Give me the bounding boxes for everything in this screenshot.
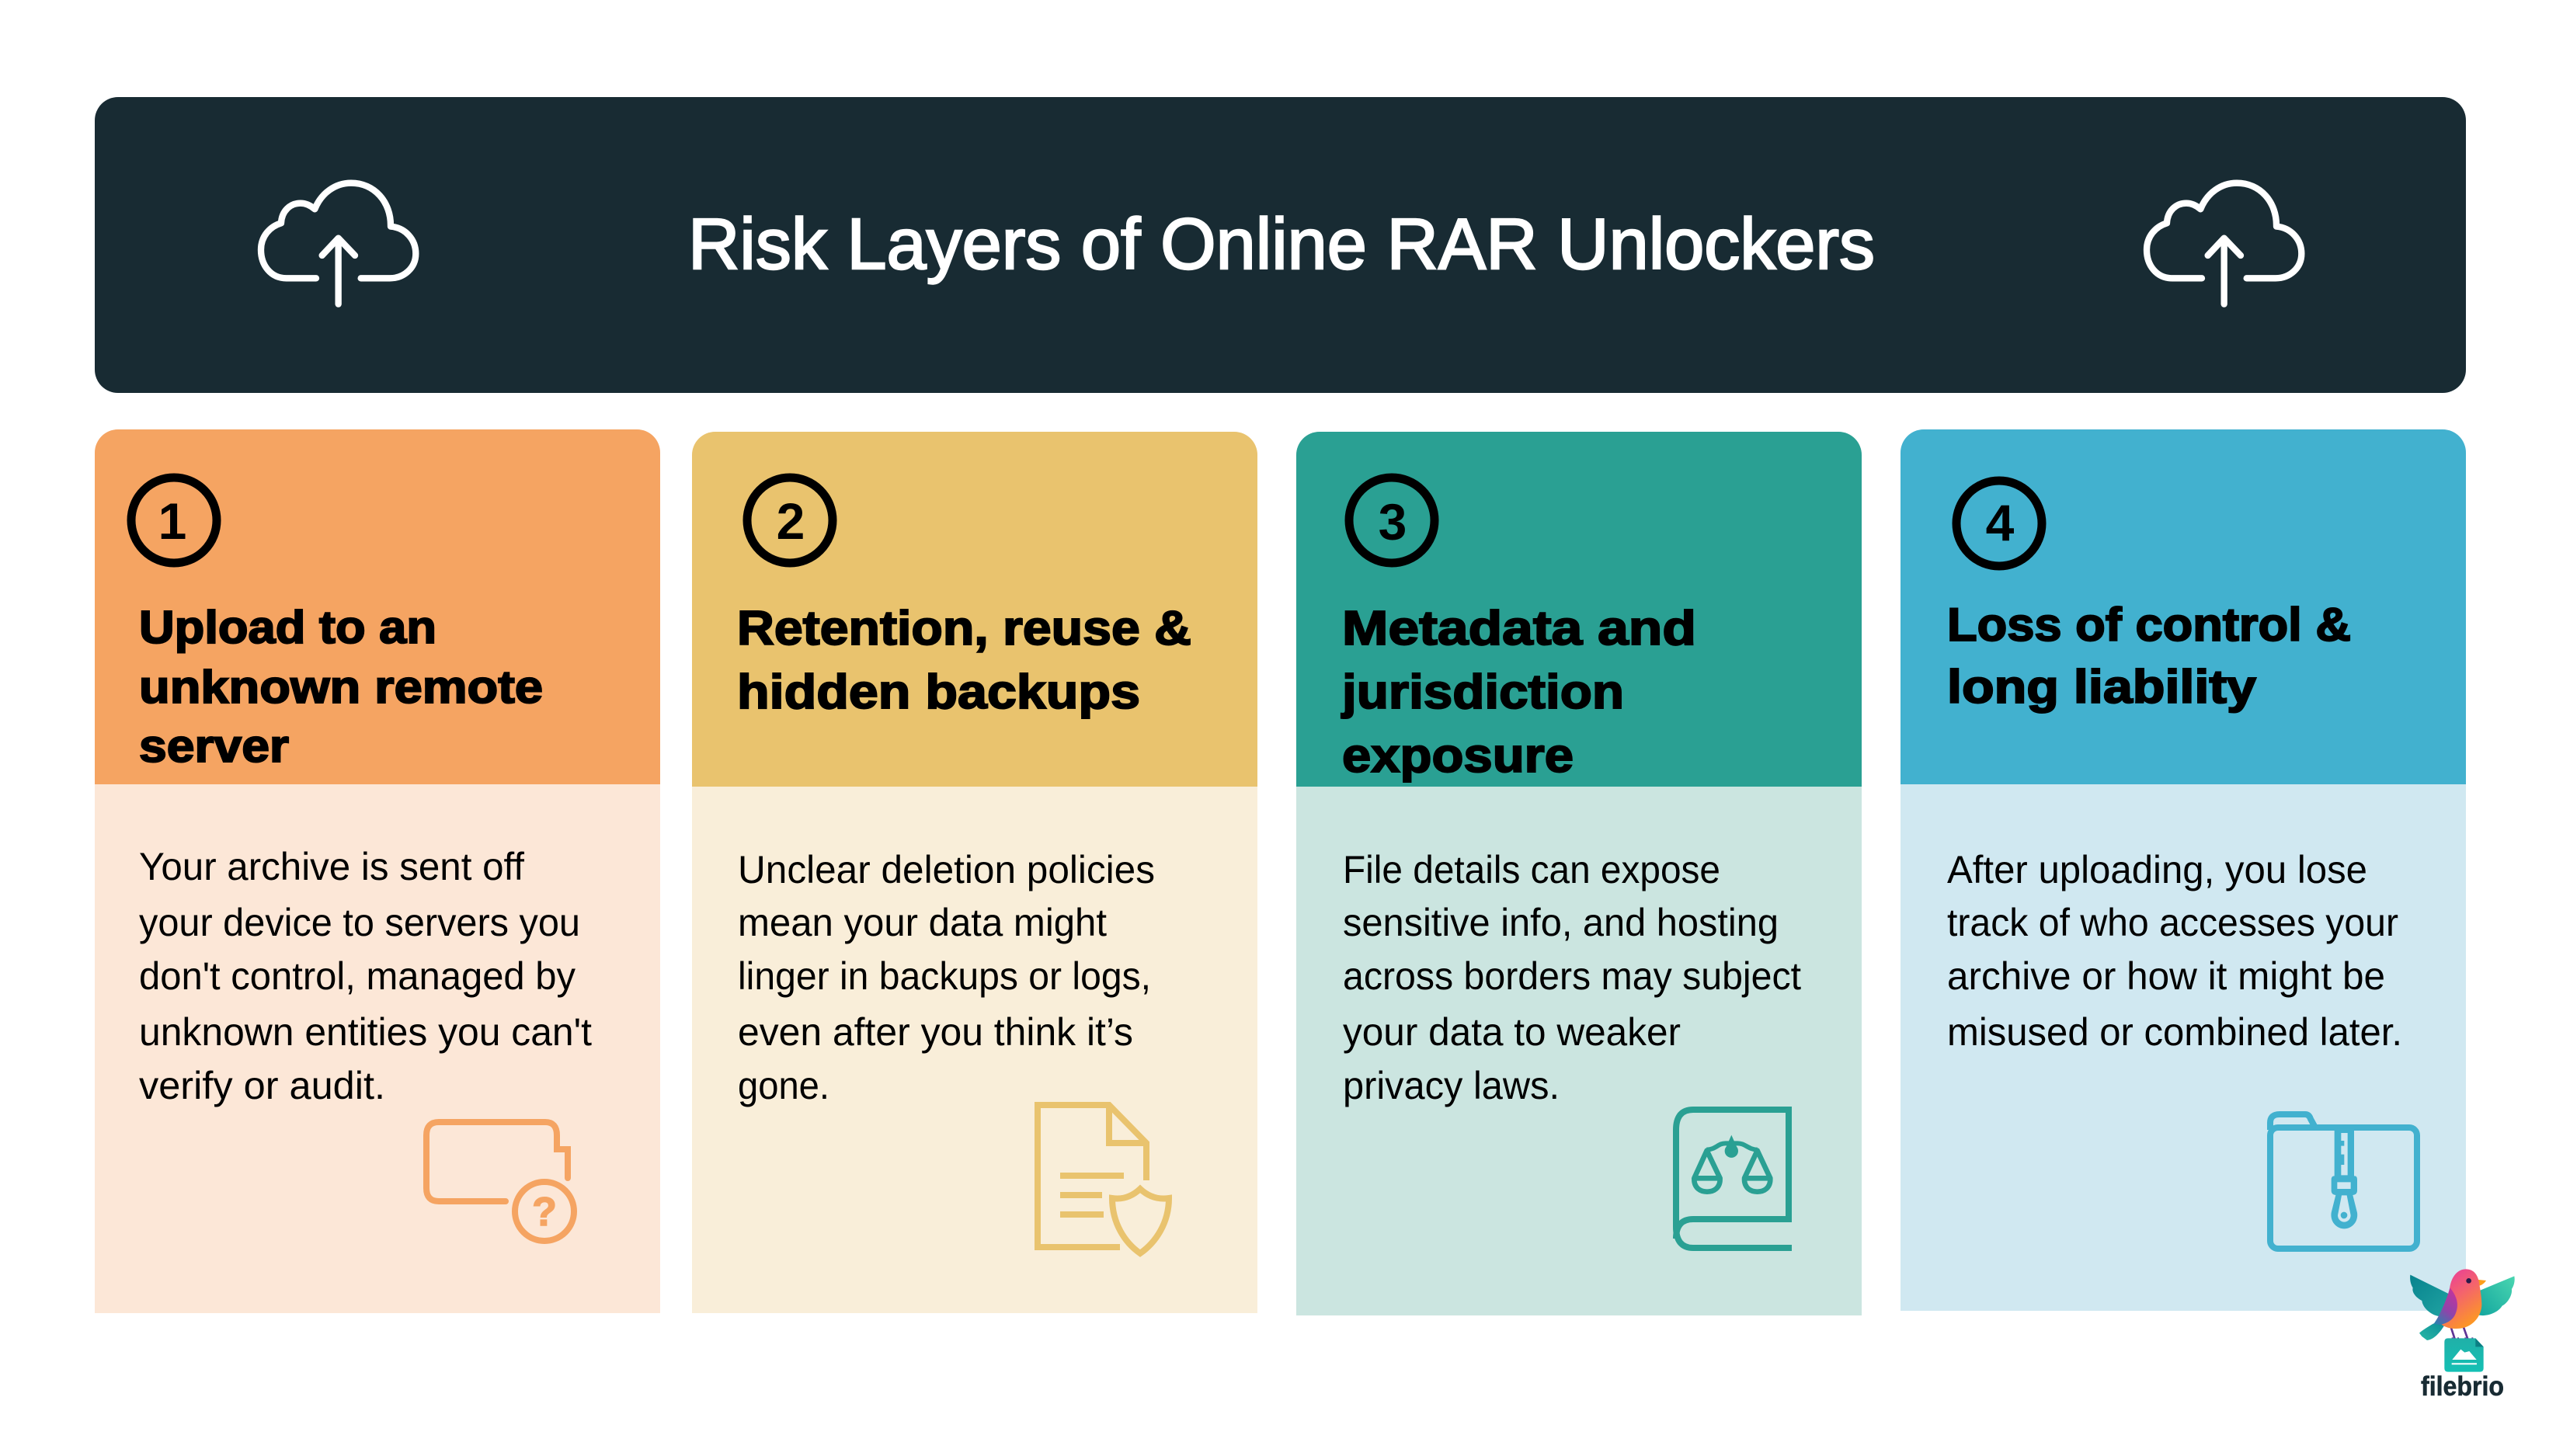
body text 2: gone. xyxy=(738,1064,829,1107)
title: Risk Layers of Online RAR Unlockers xyxy=(688,203,1875,284)
body text 4: track of who accesses your xyxy=(1947,901,2398,944)
heading 3 xyxy=(1341,602,1696,783)
body text 1: verify or audit. xyxy=(139,1064,385,1107)
icon: document with shield xyxy=(1038,1105,1169,1253)
heading 1 xyxy=(139,602,543,772)
body text 2: linger in backups or logs, xyxy=(738,954,1151,998)
panel: step 4 loss of control xyxy=(1901,429,2466,1311)
heading 1: unknown remote xyxy=(139,662,543,713)
heading 3: Metadata and xyxy=(1342,602,1696,655)
heading 4: Loss of control & xyxy=(1947,599,2351,651)
body text 3: your data to weaker xyxy=(1343,1010,1681,1054)
title banner xyxy=(95,97,2466,393)
icon: cloud upload left xyxy=(261,183,416,304)
number badge 1 xyxy=(131,478,217,563)
body text 3: across borders may subject xyxy=(1343,954,1801,998)
panel: step 1 upload xyxy=(95,429,660,1313)
heading 2 xyxy=(737,602,1191,719)
logo: filebrio xyxy=(2410,1269,2515,1402)
body text 2: even after you think it’s xyxy=(738,1010,1133,1054)
heading 2: hidden backups xyxy=(737,665,1140,719)
body text 3 xyxy=(1343,848,1801,1107)
body text 1: Your archive is sent off xyxy=(139,845,524,888)
number badge 3: 3 xyxy=(1379,493,1407,551)
body text 1: don't control, managed by xyxy=(139,954,576,998)
icon: folder with question mark xyxy=(426,1122,574,1241)
body text 2: Unclear deletion policies xyxy=(738,848,1155,891)
heading 1: server xyxy=(139,721,289,772)
body text 1 xyxy=(139,845,592,1107)
body text 3: privacy laws. xyxy=(1343,1064,1560,1107)
heading 1: Upload to an xyxy=(139,602,436,653)
number badge 1: 1 xyxy=(158,492,186,550)
number badge 4: 4 xyxy=(1986,494,2015,551)
number badge 4 xyxy=(1956,481,2042,566)
panel: step 3 metadata xyxy=(1296,432,1862,1315)
heading 3: exposure xyxy=(1342,729,1574,783)
heading 4 xyxy=(1947,599,2351,713)
body text 2: mean your data might xyxy=(738,901,1107,944)
wordmark: filebrio xyxy=(2421,1371,2504,1402)
body text 3: File details can expose xyxy=(1343,848,1720,891)
body text 2 xyxy=(738,848,1155,1107)
number badge 3 xyxy=(1349,478,1435,563)
body text 4: misused or combined later. xyxy=(1947,1010,2402,1054)
body text 3: sensitive info, and hosting xyxy=(1343,901,1779,944)
icon: cloud upload right xyxy=(2147,183,2301,304)
icon: bird on file xyxy=(2410,1269,2515,1372)
body text 4: After uploading, you lose xyxy=(1947,848,2367,891)
panel: step 2 retention xyxy=(692,432,1257,1313)
heading 4: long liability xyxy=(1947,661,2257,713)
body text 1: your device to servers you xyxy=(139,901,580,944)
heading 2: Retention, reuse & xyxy=(737,602,1191,655)
body text 4 xyxy=(1947,848,2402,1054)
heading 3: jurisdiction xyxy=(1341,665,1624,719)
body text 4: archive or how it might be xyxy=(1947,954,2385,998)
icon: zipped folder xyxy=(2270,1114,2417,1249)
number badge 2: 2 xyxy=(777,492,805,550)
number badge 2 xyxy=(747,478,833,563)
icon: law book with scales xyxy=(1676,1110,1792,1248)
icon: folder with question mark: ? xyxy=(532,1190,557,1235)
body text 1: unknown entities you can't xyxy=(139,1010,592,1054)
